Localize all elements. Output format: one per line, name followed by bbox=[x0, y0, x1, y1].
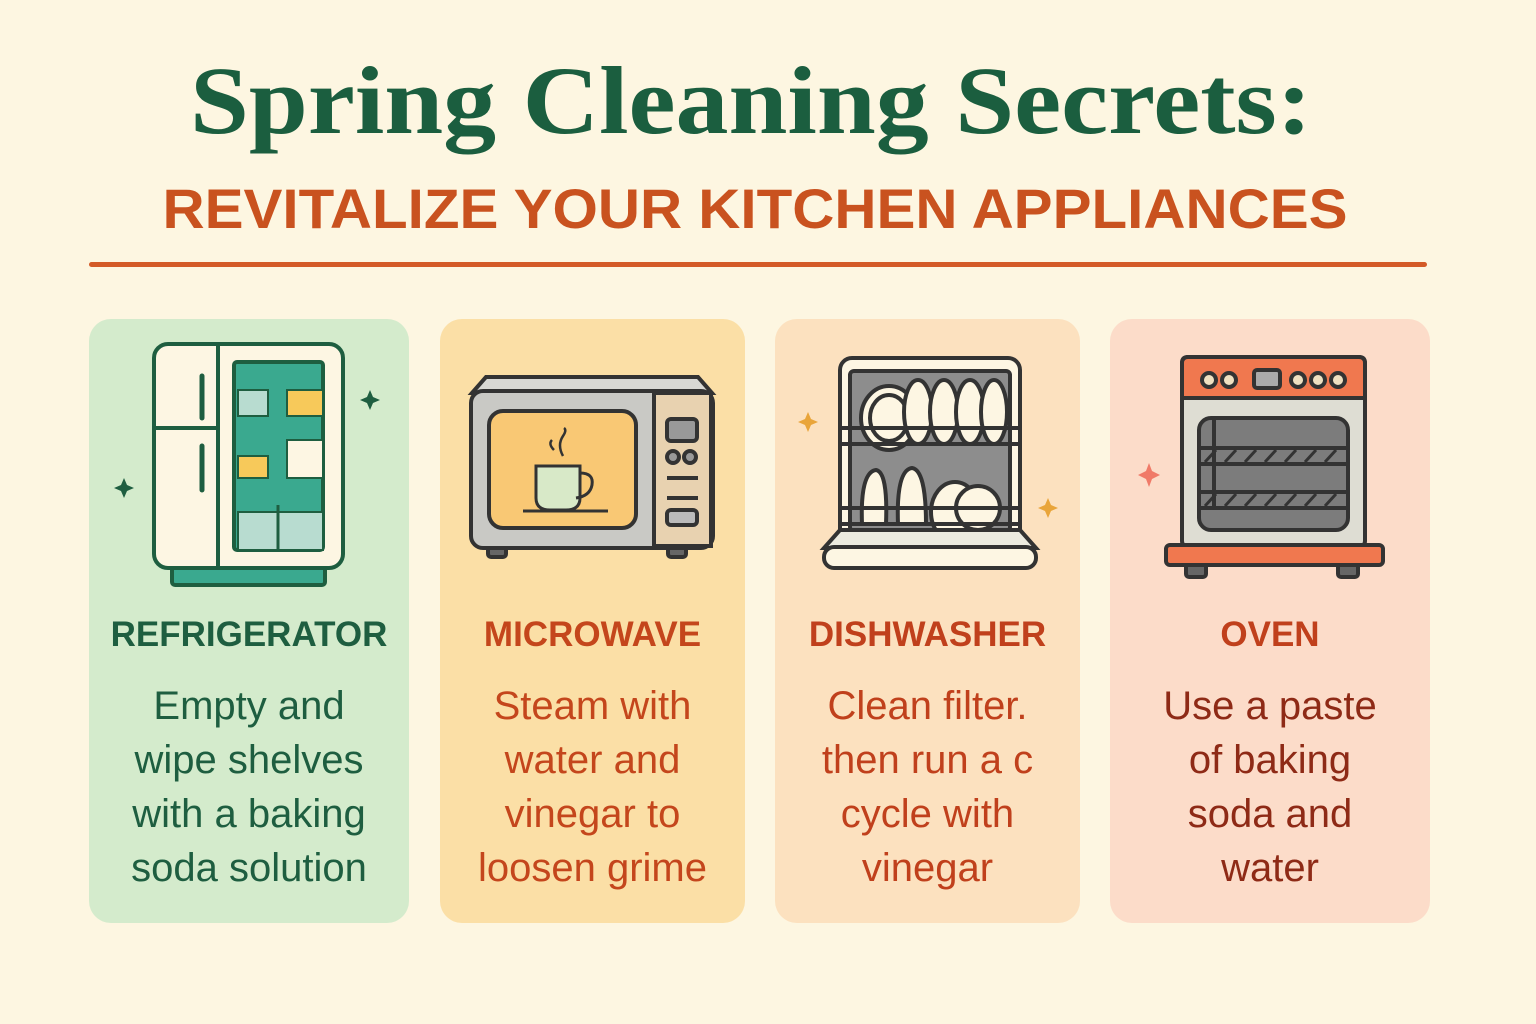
icon: oven bbox=[1138, 357, 1383, 577]
subtitle: REVITALIZE YOUR KITCHEN APPLIANCES bbox=[162, 177, 1348, 240]
icon: refrigerator bbox=[114, 344, 380, 585]
title: Spring Cleaning Secrets: bbox=[190, 47, 1312, 154]
text: dishwasher tip: cycle with bbox=[841, 792, 1014, 836]
heading: dishwasher: DISHWASHER bbox=[809, 615, 1046, 654]
text: oven tip: of baking bbox=[1189, 738, 1351, 782]
panel: microwave bbox=[440, 319, 745, 923]
text: microwave tip: Steam with bbox=[494, 684, 691, 728]
text: microwave tip: water and bbox=[505, 738, 680, 782]
icon: microwave bbox=[471, 377, 713, 557]
text: dishwasher tip: vinegar bbox=[862, 846, 993, 890]
heading: microwave: MICROWAVE bbox=[484, 615, 701, 654]
panel: oven bbox=[1110, 319, 1430, 923]
text: microwave tip: loosen grime bbox=[478, 846, 707, 890]
text: oven tip: soda and bbox=[1188, 792, 1352, 836]
icon: dishwasher bbox=[798, 358, 1058, 568]
text: microwave tip bbox=[478, 684, 707, 890]
text: dishwasher tip: Clean filter. bbox=[827, 684, 1028, 728]
text: dishwasher tip bbox=[822, 684, 1033, 890]
text: oven tip: Use a paste bbox=[1163, 684, 1377, 728]
text: dishwasher tip: then run a c bbox=[822, 738, 1033, 782]
text: oven tip: water bbox=[1221, 846, 1319, 890]
panel: dishwasher bbox=[775, 319, 1080, 923]
panel: refrigerator bbox=[89, 319, 409, 923]
heading: refrigerator: REFRIGERATOR bbox=[111, 615, 387, 654]
text: refrigerator tip: soda solution bbox=[131, 846, 367, 890]
heading: oven: OVEN bbox=[1220, 615, 1320, 654]
text: refrigerator tip: wipe shelves bbox=[134, 738, 364, 782]
text: refrigerator tip: with a baking bbox=[132, 792, 366, 836]
text: refrigerator tip bbox=[131, 684, 367, 890]
text: refrigerator tip: Empty and bbox=[153, 684, 345, 728]
text: oven tip bbox=[1163, 684, 1377, 890]
text: microwave tip: vinegar to bbox=[505, 792, 680, 836]
